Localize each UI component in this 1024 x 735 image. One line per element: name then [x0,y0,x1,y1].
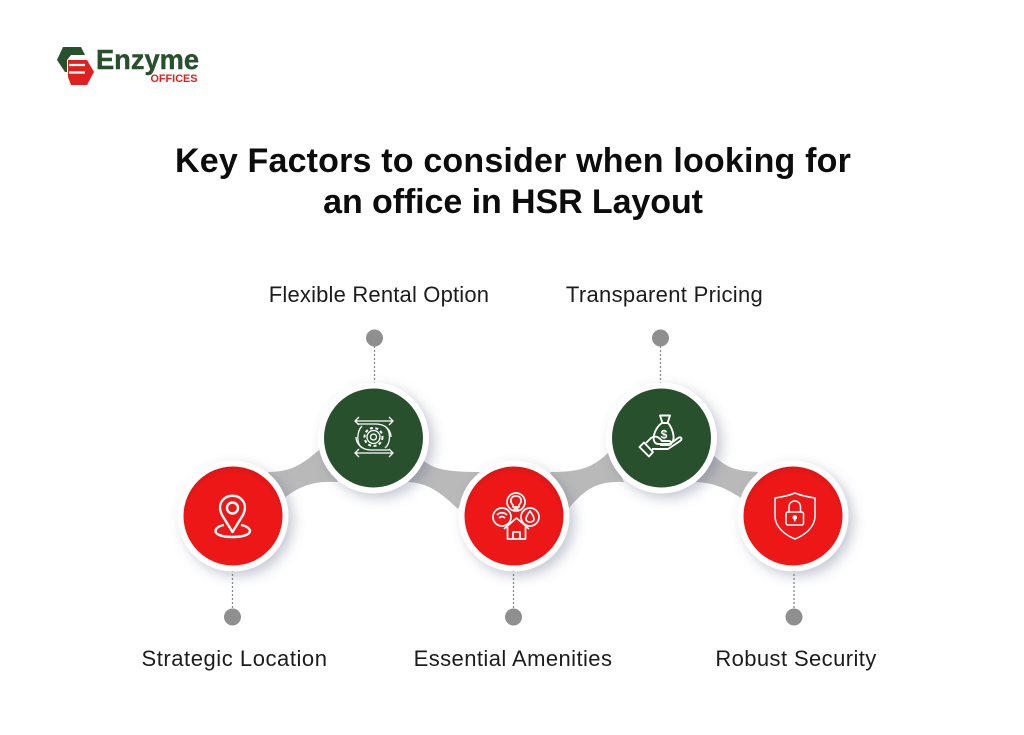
node: essential amenities [458,460,570,572]
icon: shield with padlock [775,493,815,539]
logo wordmark: Enzyme [96,44,199,75]
logo mark green hexagon [57,47,85,72]
dotted stem: pricing [660,346,662,385]
dotted stem: location [232,570,234,608]
title: Key Factors to consider when looking for [175,142,851,180]
node: transparent pricing [606,382,717,494]
label: Robust Security: Robust Security [715,646,877,671]
icon: map pin [216,496,250,537]
dot: amenities [505,608,522,626]
icon: home utilities [493,493,539,539]
label: Flexible Rental Option: Flexible Rental Option [269,282,489,307]
title [175,142,851,221]
dot: rental [366,330,383,346]
icon: hand with money bag: $ [661,428,668,442]
dot: pricing [652,330,669,346]
label: Essential Amenities: Essential Amenities [414,646,612,671]
dotted stem: rental [374,346,376,385]
node: robust security [738,460,848,572]
dotted stem: security [793,570,795,608]
logo [57,44,199,85]
logo mark red hexagon [68,60,94,85]
connector: location to rental [268,449,338,498]
connector: pricing to security [696,456,758,498]
label: Strategic Location: Strategic Location [141,646,328,671]
dotted stem: amenities [512,570,514,608]
logo wordmark: OFFICES [150,73,198,85]
node: flexible rental option [318,382,429,494]
connector: amenities to pricing [550,451,624,508]
connector: rental to amenities [408,461,480,509]
logo mark white E [69,65,85,72]
dot: location [224,608,241,626]
dot: security [786,608,802,626]
title: an office in HSR Layout [323,183,703,221]
label: Transparent Pricing: Transparent Pricing [566,282,763,307]
icon: gear with arrows [355,417,393,457]
node: strategic location [178,460,288,572]
